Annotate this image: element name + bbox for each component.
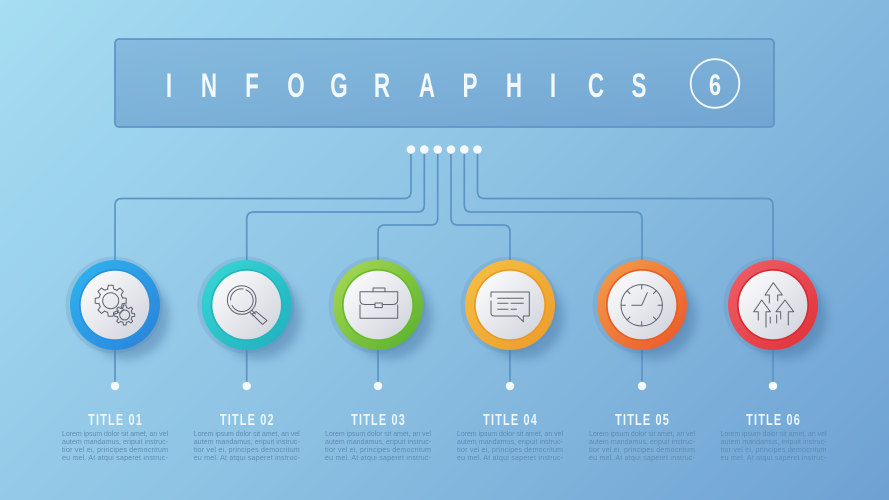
title text — [166, 67, 646, 105]
body text: tior vel ei, principes democritum — [457, 447, 563, 454]
item 6 — [720, 256, 827, 462]
item 4 — [457, 256, 564, 462]
title text: O — [287, 67, 305, 105]
body text: autem mandamus, eripuit instruc- — [325, 439, 432, 446]
body text: Lorem ipsum dolor sit amet, an vel — [194, 431, 300, 438]
body text — [62, 431, 169, 462]
body text: autem mandamus, eripuit instruc- — [194, 439, 300, 446]
body text: tior vel ei, principes democritum — [720, 447, 827, 454]
body text: eu mel. At atqui saperet instruc- — [194, 455, 300, 462]
connector lines — [115, 149, 773, 386]
body text: autem mandamus, eripuit instruc- — [457, 439, 564, 446]
body text: autem mandamus, eripuit instruc- — [62, 439, 169, 446]
title text: C — [588, 67, 604, 105]
title text: F — [245, 67, 259, 105]
icon: speech bubble — [491, 292, 529, 322]
title: TITLE 02 — [220, 411, 274, 429]
item 5 — [589, 256, 696, 462]
icon: upward arrows — [754, 283, 794, 327]
body text: eu mel. At atqui saperet instruc- — [457, 455, 564, 462]
icon: gears — [95, 285, 135, 325]
title: TITLE 01 — [88, 411, 142, 429]
icon: magnifier — [227, 286, 267, 324]
body text — [589, 431, 696, 462]
body text: Lorem ipsum dolor sit amet, an vel — [457, 431, 563, 438]
body text: eu mel. At atqui saperet instruc- — [720, 455, 827, 462]
title text: A — [419, 67, 435, 105]
title text: H — [506, 67, 522, 105]
body text — [194, 431, 300, 462]
item 2 — [194, 256, 301, 462]
anchor dot — [769, 382, 777, 390]
anchor dot — [111, 382, 119, 390]
body text: Lorem ipsum dolor sit amet, an vel — [325, 431, 431, 438]
body text: eu mel. At atqui saperet instruc- — [325, 455, 432, 462]
body text: tior vel ei, principes democritum — [325, 447, 431, 454]
title: TITLE 06 — [746, 411, 800, 429]
title: TITLE 03 — [351, 411, 405, 429]
title text: I — [550, 67, 556, 105]
number badge: 6 — [709, 67, 721, 102]
body text: eu mel. At atqui saperet instruc- — [62, 455, 169, 462]
body text: eu mel. At atqui saperet instruc- — [589, 455, 696, 462]
anchor dot — [506, 382, 514, 390]
title text: S — [632, 67, 646, 105]
body text: Lorem ipsum dolor sit amet, an vel — [62, 431, 168, 438]
title text: P — [463, 67, 477, 105]
body text: tior vel ei, principes democritum — [62, 447, 168, 454]
body text: tior vel ei, principes democritum — [194, 447, 300, 454]
title banner — [115, 39, 774, 127]
title: TITLE 05 — [615, 411, 669, 429]
body text — [457, 431, 564, 462]
item 1 — [62, 256, 169, 462]
top connector dots — [407, 145, 482, 154]
body text: autem mandamus, eripuit instruc- — [720, 439, 827, 446]
title text: I — [166, 67, 172, 105]
title text: R — [374, 67, 390, 105]
body text: tior vel ei, principes democritum — [589, 447, 695, 454]
title text: N — [201, 67, 217, 105]
body text: Lorem ipsum dolor sit amet, an vel — [720, 431, 827, 438]
body text: Lorem ipsum dolor sit amet, an vel — [589, 431, 695, 438]
anchor dot — [638, 382, 646, 390]
number badge — [691, 59, 739, 108]
icon: briefcase — [360, 288, 398, 318]
item 3 — [325, 256, 432, 462]
body text — [325, 431, 432, 462]
body text — [720, 431, 827, 462]
anchor dot — [242, 382, 251, 390]
icon: clock — [621, 285, 662, 326]
anchor dot — [374, 382, 382, 390]
title: TITLE 04 — [483, 411, 537, 429]
body text: autem mandamus, eripuit instruc- — [589, 439, 696, 446]
title text: G — [330, 67, 348, 105]
